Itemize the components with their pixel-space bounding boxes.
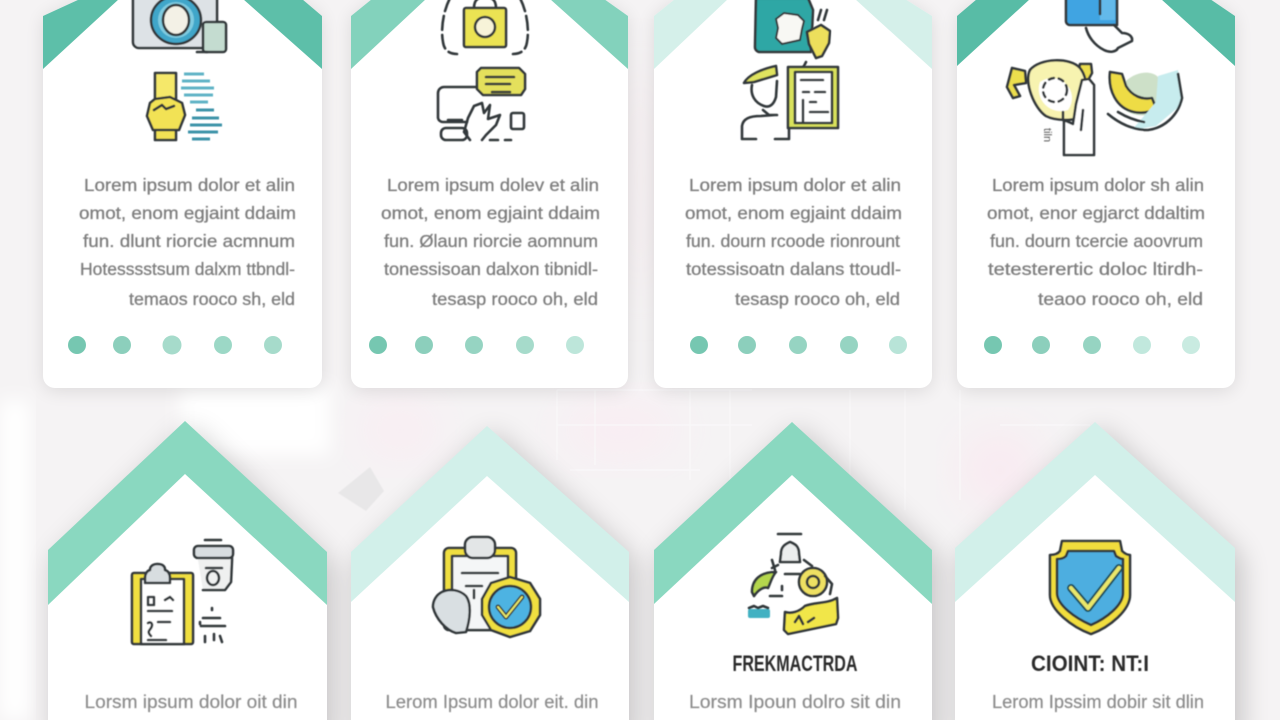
body text: tetesterertic doloc ltirdh- <box>988 259 1203 279</box>
title: CIOINT: NT:I <box>1031 651 1149 676</box>
body text: Lerom Ipsum dolor eit. din <box>386 692 598 712</box>
icon: watch and helix <box>147 73 222 140</box>
chevron <box>957 0 1235 66</box>
body text <box>79 175 296 309</box>
icon: yellow virus with hand <box>1007 60 1094 155</box>
pagination dots <box>68 336 282 354</box>
body text: Hotesssstsum dalxm ttbndl- <box>80 259 295 279</box>
body text: fun. dourn tcercie aoovrum <box>990 231 1203 251</box>
panel: card 5 <box>48 421 333 720</box>
body text: tesasp rooco oh, eld <box>432 289 598 309</box>
chevron <box>654 0 932 69</box>
body text: omot, enom egjaint ddaim <box>79 203 296 223</box>
pagination dots <box>369 336 584 354</box>
icon: blue card and hand <box>1066 0 1132 52</box>
icon: clipboard and jar <box>132 540 233 644</box>
icon: person with clipboard <box>742 66 838 139</box>
body text: Lorem ipsum dolor et alin <box>84 175 295 195</box>
icon: teal profile <box>755 0 813 52</box>
panel: card 2 <box>351 0 628 391</box>
body text <box>381 175 600 309</box>
chevron <box>351 0 628 69</box>
body text: Lorsm ipsum dolor oit din <box>84 692 298 712</box>
body text: tonessisoan dalxon tibnidl- <box>384 259 598 279</box>
icon: fruit and wave <box>1108 70 1182 130</box>
body text <box>987 175 1205 309</box>
icon: bulb <box>802 10 830 70</box>
icon: yellow virus with hand: tiln <box>1041 128 1053 142</box>
body text: teaoo rooco oh, eld <box>1038 289 1203 309</box>
icon: camera lens <box>133 0 226 52</box>
body text: fun. Ølaun riorcie aomnum <box>384 231 598 251</box>
chevron <box>43 0 322 69</box>
body text: Lorem ipsum dolev et alin <box>387 175 599 195</box>
icon: clipboard with check badge <box>433 537 540 637</box>
pagination dots <box>690 336 907 354</box>
body text <box>685 175 902 309</box>
body text: Lorem ipsum dolor et alin <box>689 175 901 195</box>
body text: totessisoatn dalans ttoudl- <box>686 259 901 279</box>
icon: monitor and printer <box>438 68 525 140</box>
icon: recycling cycle <box>748 534 838 634</box>
body text: omot, enom egjaint ddaim <box>381 203 600 223</box>
body text: Lerom Ipssim dobir sit dlin <box>992 692 1204 712</box>
panel: card 4 <box>957 0 1235 391</box>
body text: omot, enor egjarct ddaltim <box>987 203 1205 223</box>
panel: card 3 <box>654 0 932 391</box>
panel: card 1 <box>43 0 322 391</box>
body text: Lorsm Ipoun dolro sit din <box>689 692 901 712</box>
body text: Lorem ipsum dolor sh alin <box>992 175 1204 195</box>
icon: lock <box>442 0 528 54</box>
body text: fun. dlunt riorcie acmnum <box>83 231 295 251</box>
icon: shield with check <box>1050 541 1130 634</box>
body text: fun. dourn rcoode rionrount <box>686 231 900 251</box>
panel: card 8 <box>955 422 1241 720</box>
body text: temaos rooco sh, eld <box>129 289 295 309</box>
panel: card 6 <box>351 426 635 720</box>
body text: tesasp rooco oh, eld <box>735 289 900 309</box>
pagination dots <box>984 336 1200 354</box>
title: FREKMACTRDA <box>732 651 858 676</box>
panel: card 7 <box>654 422 938 720</box>
body text: omot, enom egjaint ddaim <box>685 203 902 223</box>
